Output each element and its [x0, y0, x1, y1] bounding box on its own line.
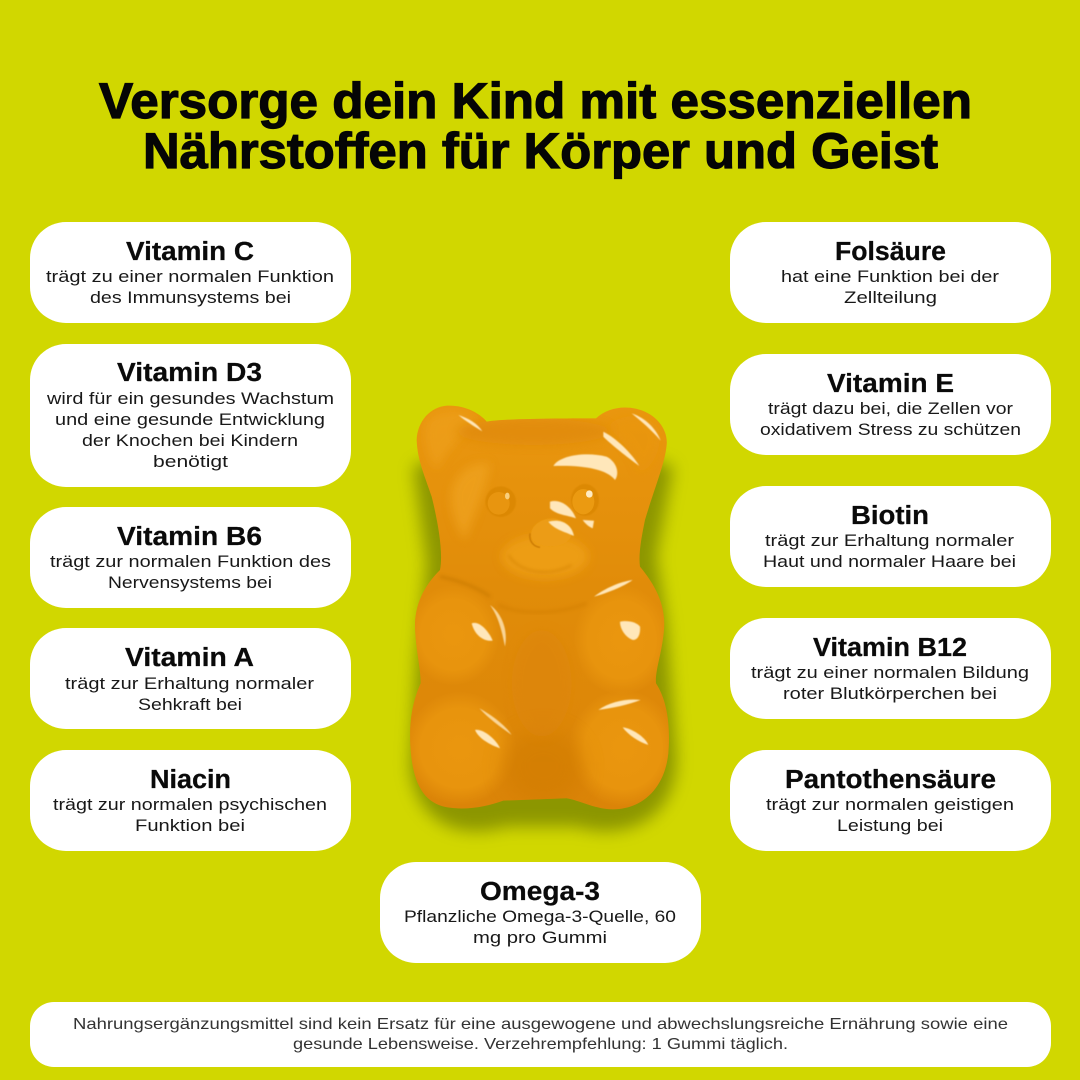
heading: Vitamin B12: Vitamin B12	[813, 634, 967, 662]
heading: Pantothensäure: Pantothensäure	[785, 766, 996, 794]
panel: Vitamin B6: Nervensystems bei	[108, 573, 272, 592]
panel: Pantothensäure: trägt zur normalen geistigen	[766, 795, 1014, 814]
panel: Vitamin C: des Immunsystems bei	[90, 288, 291, 307]
bear shading	[414, 416, 669, 797]
bear silhouette	[410, 406, 669, 809]
title: Nährstoffen für Körper und Geist	[143, 123, 938, 179]
panel: Pantothensäure: Leistung bei	[837, 816, 943, 835]
title	[99, 73, 972, 179]
panel: Niacin	[30, 750, 351, 851]
panel: Vitamin E: oxidativem Stress zu schützen	[760, 420, 1021, 439]
panel: Vitamin A	[30, 628, 351, 729]
heading: Vitamin C: Vitamin C	[126, 238, 254, 266]
title: Versorge dein Kind mit essenziellen	[99, 73, 972, 129]
panel: Omega-3	[380, 862, 701, 963]
panel: Folsäure: hat eine Funktion bei der	[781, 267, 999, 286]
panel: Biotin: Haut und normaler Haare bei	[763, 552, 1016, 571]
panel: Folsäure: Zellteilung	[844, 288, 937, 307]
panel: Vitamin B12: roter Blutkörperchen bei	[783, 684, 997, 703]
panel: Vitamin A: trägt zur Erhaltung normaler	[65, 674, 314, 693]
panel: Vitamin B6	[30, 507, 351, 608]
illustration: orange gummy bear	[403, 406, 678, 831]
heading: Vitamin E: Vitamin E	[827, 370, 954, 398]
panel: Vitamin D3	[30, 344, 351, 487]
panel: Vitamin D3: und eine gesunde Entwicklung	[55, 410, 325, 429]
heading: Vitamin D3: Vitamin D3	[117, 359, 262, 387]
bear highlights	[458, 413, 661, 748]
panel: Folsäure	[730, 222, 1051, 323]
panel: disclaimer: Nahrungsergänzungsmittel sind kein Ersatz für eine ausgewogene und abwechslungsreiche Ernährung sowie eine	[73, 1016, 1008, 1033]
heading: Vitamin B6: Vitamin B6	[117, 523, 262, 551]
heading: Biotin: Biotin	[851, 502, 929, 530]
bear shadow	[410, 457, 677, 831]
panel: Biotin	[730, 486, 1051, 587]
panel: Vitamin D3: benötigt	[153, 452, 228, 471]
panel: Vitamin E: trägt dazu bei, die Zellen vor	[768, 399, 1013, 418]
panel: Pantothensäure	[730, 750, 1051, 851]
panel: Vitamin D3: der Knochen bei Kindern	[82, 431, 298, 450]
heading: Vitamin A: Vitamin A	[125, 644, 254, 672]
panel: Omega-3: mg pro Gummi	[473, 928, 607, 947]
panel: Vitamin B6: trägt zur normalen Funktion des	[50, 552, 331, 571]
panel: Vitamin C: trägt zu einer normalen Funktion	[46, 267, 334, 286]
panel: Vitamin C	[30, 222, 351, 323]
heading: Omega-3: Omega-3	[480, 878, 600, 906]
panel: Niacin: Funktion bei	[135, 816, 245, 835]
panel: Vitamin E	[730, 354, 1051, 455]
panel: Biotin: trägt zur Erhaltung normaler	[765, 531, 1014, 550]
panel: Omega-3: Pflanzliche Omega-3-Quelle, 60	[404, 907, 676, 926]
bear eyes and nose	[485, 484, 599, 572]
panel: Vitamin D3: wird für ein gesundes Wachstum	[46, 389, 334, 408]
heading: Niacin: Niacin	[150, 766, 231, 794]
panel: Vitamin A: Sehkraft bei	[138, 695, 242, 714]
panel: Niacin: trägt zur normalen psychischen	[53, 795, 327, 814]
heading: Folsäure: Folsäure	[835, 238, 946, 266]
panel: disclaimer	[30, 1002, 1051, 1067]
panel: Vitamin B12	[730, 618, 1051, 719]
panel: disclaimer: gesunde Lebensweise. Verzehrempfehlung: 1 Gummi täglich.	[293, 1036, 788, 1053]
panel: Vitamin B12: trägt zu einer normalen Bildung	[751, 663, 1029, 682]
